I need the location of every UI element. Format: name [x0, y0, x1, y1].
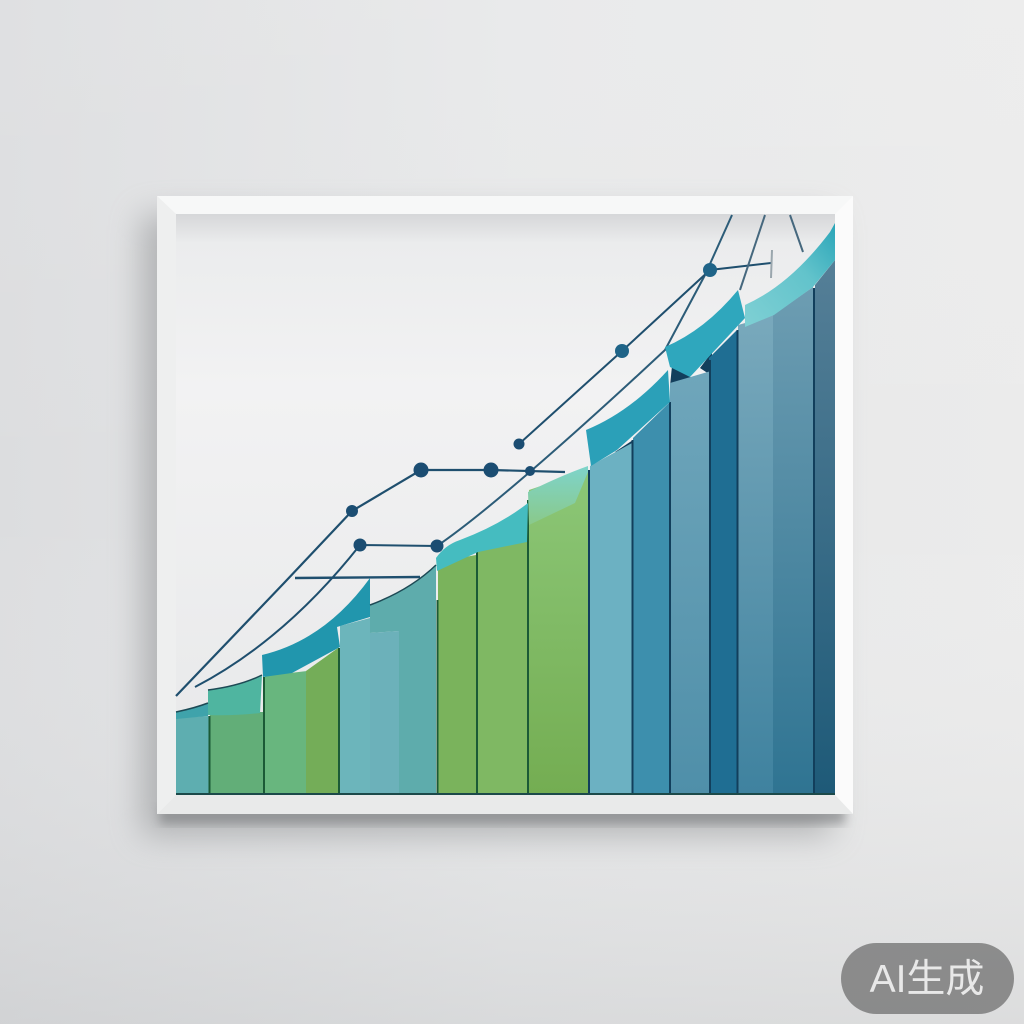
line: small tick [771, 250, 772, 278]
bar 5 [340, 618, 370, 794]
AI badge [841, 943, 1014, 1014]
bar 9 [478, 540, 527, 794]
ribbon 7 [586, 370, 670, 466]
line: lower trend [195, 545, 437, 687]
frame shadow [142, 215, 845, 835]
line: long curve [437, 215, 732, 546]
picture frame [157, 196, 853, 814]
bar 8 [438, 555, 476, 794]
bar 11 [590, 443, 632, 794]
bar separators [210, 288, 814, 794]
bar 17 [815, 260, 835, 794]
bars [176, 260, 835, 794]
line: horizontal [295, 577, 420, 578]
chart area background [176, 214, 835, 795]
line: upper trend [176, 470, 565, 696]
ribbon 9 [745, 223, 835, 327]
bar 3 [265, 671, 307, 794]
bar 13 [670, 371, 711, 794]
line: short diagonals [740, 215, 803, 290]
AI badge: AI生成 [870, 958, 984, 1001]
bar 6 [370, 631, 399, 794]
bar 12 [633, 402, 670, 794]
bar 2 [210, 712, 263, 794]
ribbons on bar tops [176, 223, 835, 719]
bar 4 [306, 648, 338, 794]
data point dots [346, 263, 717, 552]
bar 1 [176, 716, 209, 794]
dark shadows behind bar tops [615, 352, 712, 460]
ribbon 1 [176, 703, 208, 719]
bar 16 [773, 287, 813, 794]
ribbon 3 [262, 578, 370, 677]
bar 10 [529, 470, 588, 794]
ribbon 5 [436, 503, 528, 571]
ribbon top edges [176, 565, 436, 712]
bar baseline [176, 793, 835, 795]
ribbon 8 [665, 290, 745, 377]
ribbon 2 [208, 675, 262, 715]
bar 15 [738, 315, 774, 794]
trend lines [176, 215, 803, 696]
ribbon 6 [528, 466, 588, 525]
bar 14 [709, 330, 737, 794]
line: upper diagonal [519, 263, 771, 444]
bar 7 [370, 565, 436, 794]
